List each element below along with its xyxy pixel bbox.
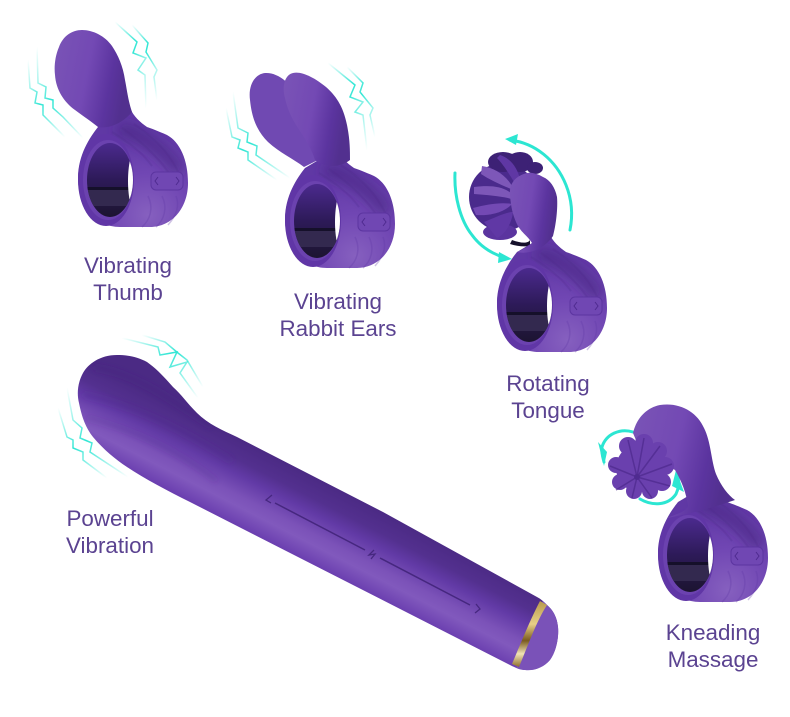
product: powerful vibration wand xyxy=(58,335,575,680)
wand head ribs xyxy=(196,412,211,424)
label: kneading massage: Massage xyxy=(668,647,758,672)
tongue rotor xyxy=(469,152,543,246)
label: vibrating rabbit ears: Vibrating xyxy=(294,289,382,314)
thumb head xyxy=(55,30,132,127)
label: kneading massage: Kneading xyxy=(666,620,760,645)
label: vibrating thumb: Vibrating xyxy=(84,253,172,278)
wand body xyxy=(78,355,575,680)
thumb ring body xyxy=(78,108,188,227)
icon: vibration waves, rabbit ears right xyxy=(328,63,375,150)
product: rotating tongue ring xyxy=(455,134,607,352)
rabbit ears ring body xyxy=(285,149,395,268)
wand control strip xyxy=(266,495,480,613)
label: vibrating rabbit ears: Rabbit Ears xyxy=(280,316,396,341)
kneading arrow, upper xyxy=(598,431,633,466)
left rabbit ear xyxy=(250,73,318,167)
rotating tongue arrow, top xyxy=(505,134,572,230)
icon: vibration waves, wand left xyxy=(58,388,128,478)
label: vibrating thumb: Thumb xyxy=(93,280,163,305)
label: powerful vibration: Vibration xyxy=(66,533,154,558)
product: kneading massage ring xyxy=(598,404,768,602)
right rabbit ear xyxy=(284,73,350,166)
rotating tongue ring body xyxy=(497,233,607,352)
label: rotating tongue: Tongue xyxy=(511,398,585,423)
wand end cap xyxy=(516,600,558,670)
kneading arrow, lower xyxy=(640,470,684,504)
icon: vibration waves, thumb left xyxy=(28,47,83,138)
icon: vibration waves, wand top xyxy=(122,335,203,398)
icon: vibration waves, thumb right xyxy=(115,22,157,108)
tongue head xyxy=(510,173,557,253)
product: vibrating thumb ring xyxy=(28,22,188,227)
rotating tongue arrow, left xyxy=(455,173,512,263)
kneading head xyxy=(633,404,735,518)
gold band xyxy=(512,601,547,667)
label: powerful vibration: Powerful xyxy=(66,506,154,531)
kneading massage rotor xyxy=(608,434,674,499)
icon: vibration waves, rabbit ears left xyxy=(226,92,290,180)
product: vibrating rabbit ears ring xyxy=(226,63,395,268)
kneading massage ring body xyxy=(658,483,768,602)
label: rotating tongue: Rotating xyxy=(506,371,590,396)
